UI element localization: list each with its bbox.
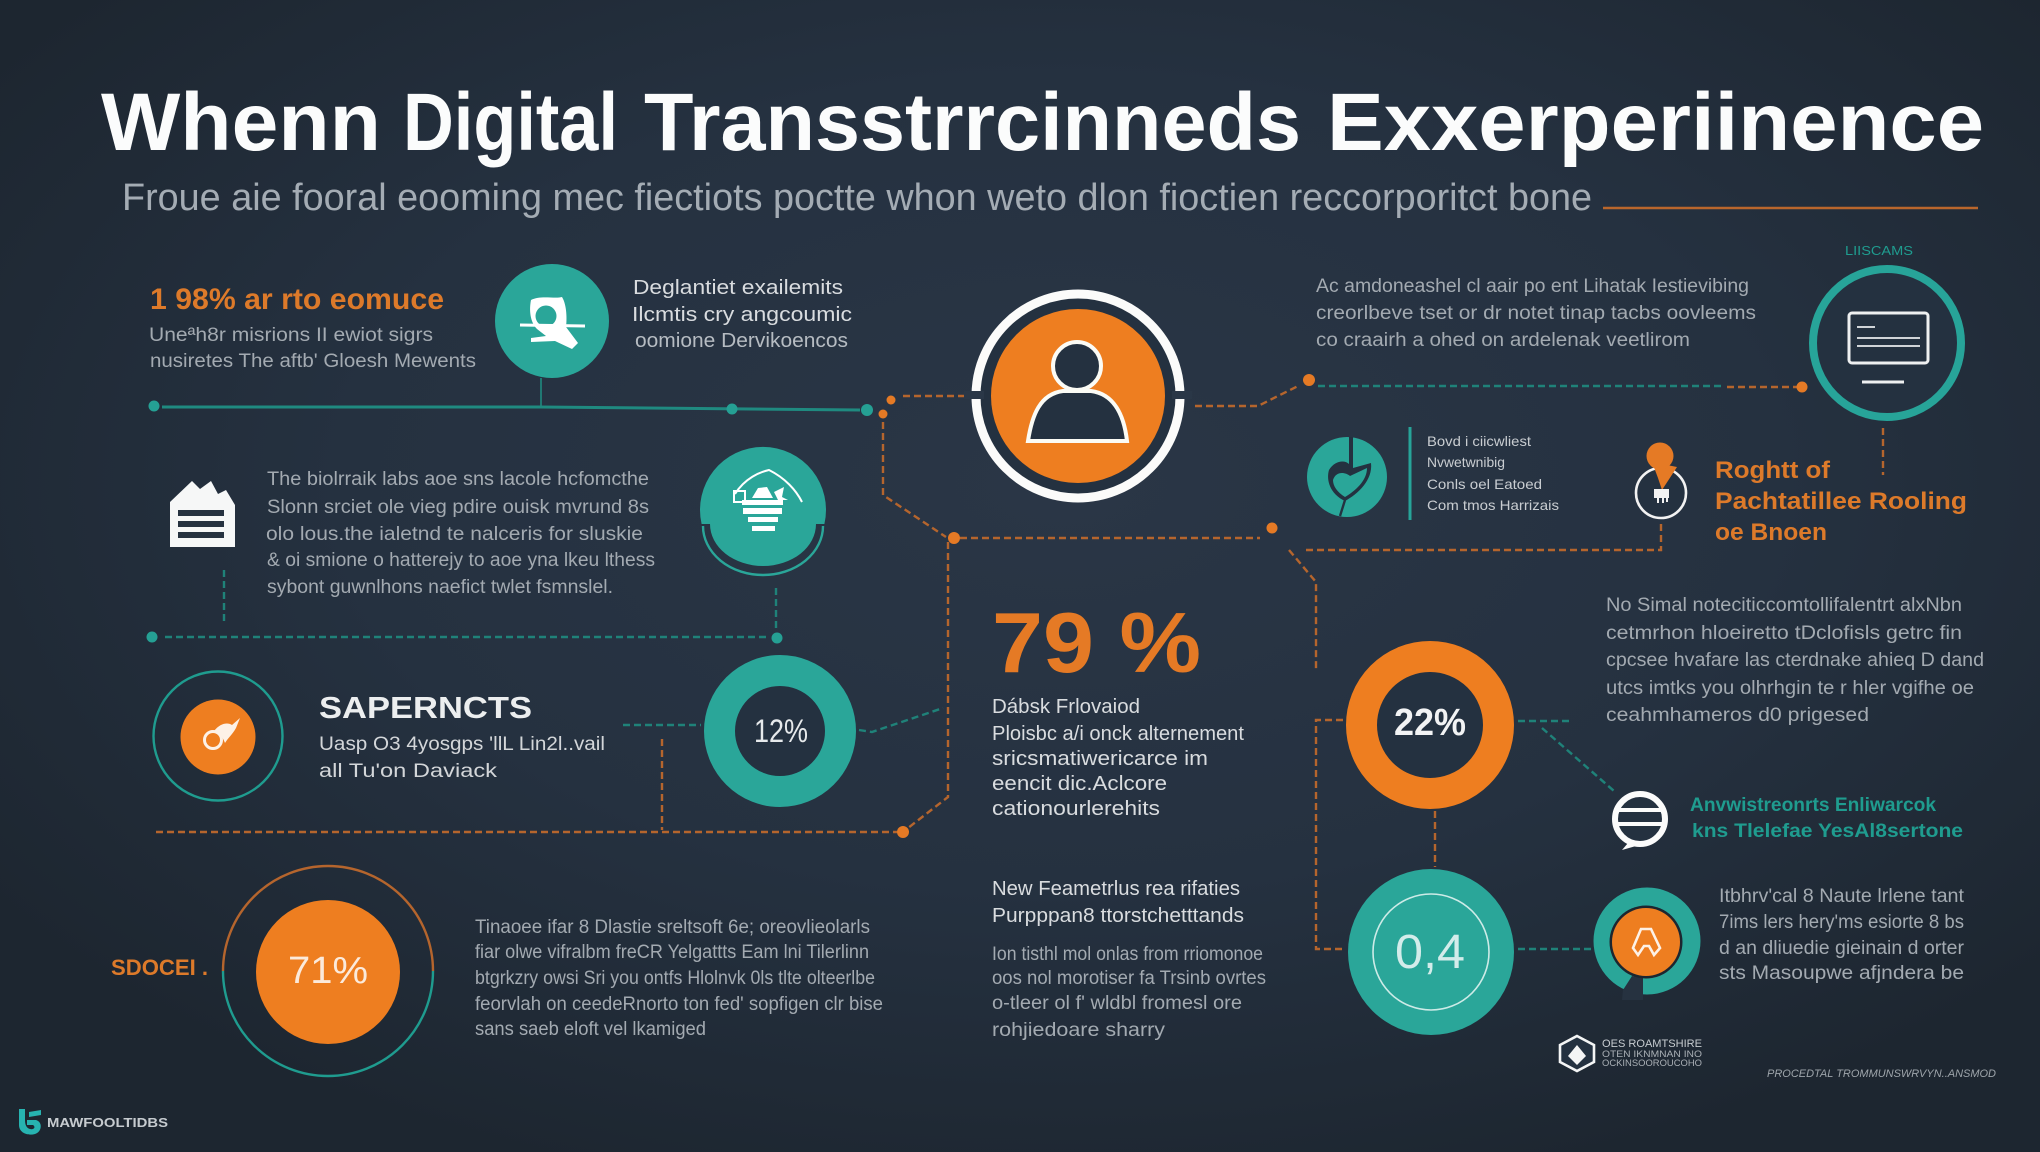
text block: right middle	[1606, 595, 1984, 726]
text block: 79% description	[992, 696, 1244, 820]
stat block: top left: nusiretes The aftb' Gloesh Mewents	[150, 351, 476, 372]
divider: shield legend	[1408, 427, 1412, 520]
text block: new features	[992, 944, 1266, 1041]
text block: bottom left	[475, 917, 883, 1040]
text block: right middle: No Simal noteciticcomtollifalentrt alxNbn	[1606, 595, 1962, 616]
footer credit: PROCEDTAL TROMMUNSWRVYN..ANSMOD	[1767, 1068, 1996, 1080]
title	[101, 77, 1984, 168]
text block: bottom left: Tinaoee ifar 8 Dlastie sreltsoft 6e; oreovlieolarls	[475, 917, 870, 938]
logo: bottom left: MAWFOOLTIDBS	[47, 1115, 168, 1130]
donut: 12%	[720, 670, 840, 792]
icon: document	[170, 481, 235, 547]
stat circle: 0.4	[1348, 869, 1514, 1035]
text block: bottom right: Itbhrv'cal 8 Naute lrlene tant	[1719, 886, 1965, 907]
heading: saperncts: SAPERNCTS	[319, 690, 532, 725]
stat block: top left: Uneªh8r misrions II ewiot sigrs	[149, 325, 433, 346]
text block: bottom left: fiar olwe vifralbm freCR Yelgattts Eam lni Tilerlinn	[475, 942, 869, 963]
text block: second row: Slonn srciet ole vieg pdire ouisk mvrund 8s	[267, 497, 649, 518]
text block: right middle: utcs imtks you olhrhgin te r hler vgifhe oe	[1606, 678, 1974, 699]
text block: right middle: cetmrhon hloeiretto tDclofisls getrc fin	[1606, 623, 1962, 644]
text block: top centre left: Deglantiet exailemits	[633, 277, 843, 299]
title: Exxerperiinence	[1327, 77, 1984, 168]
donut: 22%	[1362, 656, 1498, 794]
icon: orange badge in teal notched ring	[1594, 888, 1700, 1000]
stat circle: 71%: 71%	[288, 950, 368, 992]
text block: saperncts: Uasp O3 4yosgps 'llL Lin2l..vail	[319, 734, 605, 755]
title: Transstrrcinneds	[644, 77, 1301, 168]
text block: saperncts	[319, 734, 605, 782]
donut: 12%: 12%	[754, 713, 808, 749]
icon: teal magnifier circle	[495, 264, 609, 378]
label: top right ring: LIISCAMS	[1845, 243, 1913, 258]
orange heading: pin callout: Pachtatillee Rooling	[1715, 488, 1967, 515]
text block: bottom right: sts Masoupwe afjndera be	[1719, 963, 1964, 984]
text block: bottom right	[1719, 886, 1965, 984]
text block: shield legend: Bovd i ciicwliest	[1427, 433, 1531, 449]
stat block: top left: 1 98% ar rto eomuce	[150, 283, 444, 316]
logo: bottom left	[19, 1109, 168, 1135]
text block: 79% description: Dábsk Frlovaiod	[992, 696, 1140, 718]
text block: bottom left: feorvlah on ceedeRnorto ton fed' sopfigen clr bise	[475, 994, 883, 1015]
stat block: top left	[149, 283, 476, 372]
text block: 79% description: eencit dic.Aclcore	[992, 773, 1167, 795]
text block: right middle: ceahmhameros d0 prigesed	[1606, 705, 1869, 726]
orange heading: pin callout	[1715, 457, 1967, 546]
icon: teal hive circle	[700, 447, 826, 575]
text block: new features: o-tleer ol f' wldbl fromesl ore	[992, 993, 1242, 1014]
donut: 22%: 22%	[1394, 702, 1466, 744]
logo: hexagon badge: OES ROAMTSHIRE	[1602, 1038, 1702, 1050]
orange heading: pin callout: oe Bnoen	[1715, 519, 1827, 546]
heading: new features: Purpppan8 ttorstchetttands	[992, 905, 1244, 927]
icon: orange badge in teal ring	[154, 672, 282, 800]
orange heading: pin callout: Roghtt of	[1715, 457, 1831, 484]
icon: orange pin	[1636, 442, 1686, 518]
text block: shield legend: Conls oel Eatoed	[1427, 476, 1542, 492]
icon: white globe	[1615, 794, 1665, 850]
text block: top right	[1316, 276, 1756, 351]
text block: shield legend: Nvwetwnibig	[1427, 454, 1505, 470]
heading: new features: New Feametrlus rea rifaties	[992, 878, 1240, 900]
icon: teal shield	[1307, 437, 1387, 517]
title: Whenn	[101, 77, 381, 168]
text block: second row: olo lous.the ialetnd te nalceris for sluskie	[266, 524, 643, 545]
text block: bottom left: sans saeb eloft vel lkamiged	[475, 1019, 706, 1040]
logo: hexagon badge	[1560, 1036, 1702, 1071]
heading: new features	[992, 878, 1244, 927]
text block: bottom left: btgrkzry owsi Sri you ontfs Hlolnvk 0ls tlte olteerlbe	[475, 968, 875, 989]
title: Digital	[403, 77, 618, 168]
text block: top right: creorlbeve tset or dr notet tinap tacbs oovleems	[1316, 303, 1756, 324]
logo: hexagon badge: OCKINSOOROUCOHO	[1602, 1058, 1702, 1068]
central person badge	[964, 294, 1192, 498]
text block: shield legend	[1427, 433, 1559, 513]
text block: 79% description: sricsmatiwericarce im	[992, 748, 1208, 770]
logo: hexagon badge: OTEN IKNMNAN INO	[1602, 1049, 1702, 1059]
section label: sdocei: SDOCEI .	[111, 955, 208, 980]
text block: 79% description: cationourlerehits	[992, 798, 1160, 820]
teal heading: globe callout: kns Tlelefae YesAl8sertone	[1692, 821, 1963, 842]
text block: new features: oos nol morotiser fa Trsinb ovrtes	[992, 968, 1266, 989]
text block: top centre left	[632, 277, 852, 352]
text block: second row: & oi smione o hatterejy to aoe yna lkeu lthess	[267, 550, 655, 571]
big stat: 79%: 79 %	[992, 596, 1201, 691]
text block: second row: sybont guwnlhons naefict twlet fsmnslel.	[267, 577, 613, 598]
connectors: teal and orange network	[146, 374, 1883, 949]
text block: top right: co craairh a ohed on ardelenak veetlirom	[1316, 330, 1690, 351]
subtitle: Froue aie fooral eooming mec fiectiots poctte whon weto dlon fioctien reccorporitct bone	[122, 177, 1592, 219]
text block: saperncts: all Tu'on Daviack	[319, 761, 498, 782]
text block: 79% description: Ploisbc a/i onck alternement	[992, 723, 1244, 745]
icon: monitor in teal ring	[1813, 269, 1961, 417]
text block: bottom right: 7ims lers hery'ms esiorte 8 bs	[1719, 912, 1964, 933]
text block: new features: rohjiedoare sharry	[992, 1020, 1166, 1041]
text block: new features: Ion tisthl mol onlas from rriomonoe	[992, 944, 1263, 965]
text block: shield legend: Com tmos Harrizais	[1427, 497, 1559, 513]
subtitle rule	[1603, 207, 1978, 209]
text block: second row	[266, 469, 655, 598]
text block: right middle: cpcsee hvafare las cterdnake ahieq D dand	[1606, 650, 1984, 671]
text block: top right: Ac amdoneashel cl aair po ent Lihatak Iestievibing	[1316, 276, 1749, 297]
text block: top centre left: oomione Dervikoencos	[635, 330, 848, 352]
stat circle: 71%	[223, 866, 433, 1076]
stat circle: 0.4: 0,4	[1395, 926, 1465, 979]
teal heading: globe callout	[1690, 795, 1963, 842]
text block: top centre left: Ilcmtis cry angcoumic	[632, 304, 852, 326]
teal heading: globe callout: Anvwistreonrts Enliwarcok	[1690, 795, 1936, 816]
text block: second row: The biolrraik labs aoe sns lacole hcfomcthe	[267, 469, 649, 490]
text block: bottom right: d an dliuedie gieinain d orter	[1719, 938, 1965, 959]
